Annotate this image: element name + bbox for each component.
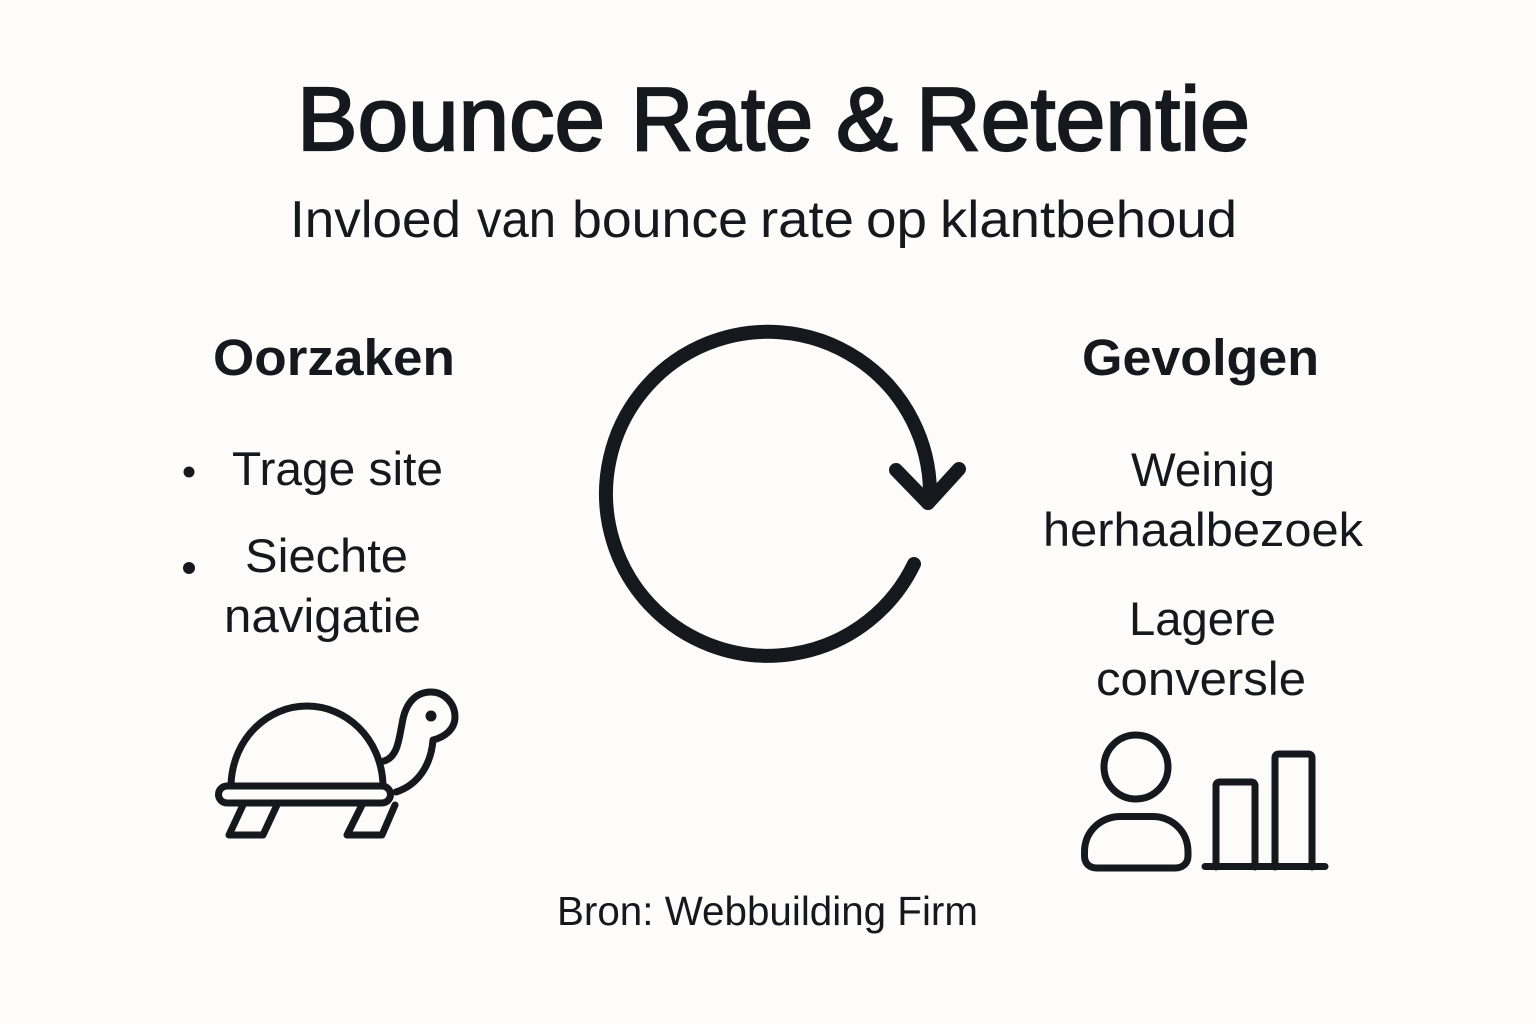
title: & (836, 70, 898, 170)
heading: Oorzaken: Oorzaken (213, 329, 455, 386)
title: Retentie (916, 70, 1250, 170)
text: Lagere conversle: conversle (1096, 652, 1306, 705)
bullet item: Siechte navigatie: Siechte (245, 529, 408, 582)
icon: turtle (218, 692, 455, 835)
text: Weinig herhaalbezoek: herhaalbezoek (1043, 503, 1364, 556)
title (297, 70, 1250, 170)
subtitle (290, 191, 1237, 249)
text: Weinig herhaalbezoek (1043, 443, 1364, 556)
subtitle: van (477, 191, 556, 249)
subtitle: bounce (572, 191, 748, 249)
subtitle: op (866, 191, 927, 249)
text: Weinig herhaalbezoek: Weinig (1131, 443, 1275, 496)
subtitle: klantbehoud (940, 191, 1237, 249)
text: Lagere conversle (1096, 592, 1306, 705)
subtitle: rate (760, 191, 854, 249)
bullet item: Trage site: Trage site (232, 442, 443, 495)
subtitle: Invloed (290, 191, 461, 249)
cycle arrow (606, 332, 959, 656)
title: Bounce (297, 70, 605, 170)
heading: Gevolgen: Gevolgen (1082, 329, 1319, 386)
source: Bron: Webbuilding Firm (557, 888, 978, 934)
panel: consequences (1043, 329, 1364, 868)
text: Lagere conversle: Lagere (1129, 592, 1276, 645)
icon: person with bar chart (1084, 735, 1325, 868)
title: Rate (631, 70, 813, 170)
bullet item: Siechte navigatie (183, 529, 421, 642)
panel: causes (183, 329, 455, 835)
bullet item: Siechte navigatie: navigatie (224, 589, 421, 642)
